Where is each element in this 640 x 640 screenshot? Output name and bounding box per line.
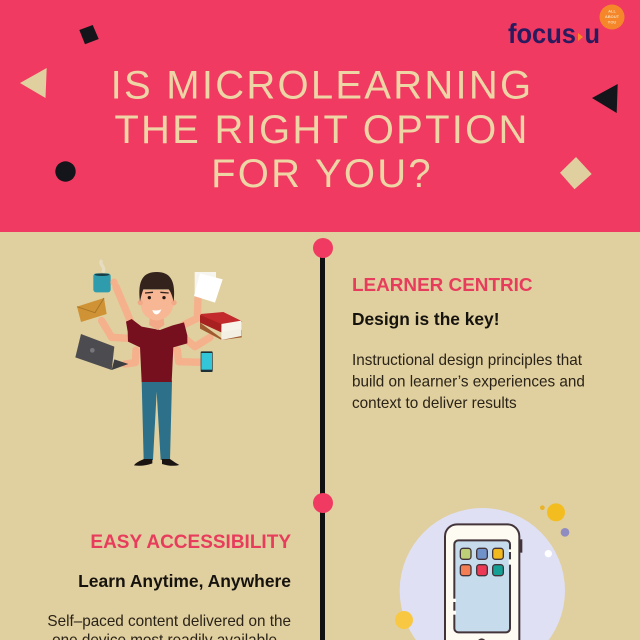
title — [111, 64, 533, 196]
title: THE RIGHT OPTION — [114, 108, 530, 152]
jeans — [142, 381, 172, 460]
badge: all about you: ALL — [608, 8, 616, 14]
logo: focus u — [508, 4, 624, 49]
subheading: Learn Anytime, Anywhere — [78, 571, 291, 591]
head — [138, 272, 177, 321]
section: easy accessibility text — [47, 532, 291, 640]
decorative dots — [395, 503, 569, 629]
phone screen — [454, 540, 510, 632]
title: FOR YOU? — [211, 152, 433, 196]
heading: LEARNER CENTRIC — [352, 275, 533, 296]
logo: focus u: focus — [508, 18, 576, 49]
background panel — [0, 232, 640, 640]
icon: cream diamond — [560, 157, 592, 189]
title: IS MICROLEARNING — [111, 64, 533, 108]
neck — [149, 315, 164, 330]
phone side button — [519, 539, 522, 553]
body text: context to deliver results — [352, 395, 517, 412]
coffee mug — [93, 260, 118, 292]
body text — [47, 613, 291, 640]
body text: Instructional design principles that — [352, 352, 583, 369]
smartphone — [201, 351, 213, 372]
arms — [102, 287, 210, 364]
body text: build on learner’s experiences and — [352, 374, 585, 390]
subheading: Design is the key! — [352, 309, 499, 329]
section: learner centric text — [352, 275, 585, 412]
lavender circle — [400, 508, 565, 640]
laptop — [75, 334, 128, 370]
shirt — [126, 319, 187, 382]
badge: all about you: YOU — [608, 20, 616, 24]
app icons — [460, 548, 503, 576]
envelope — [77, 298, 107, 322]
icon: black circle — [55, 161, 76, 182]
timeline dot 2 — [313, 493, 333, 513]
heading: EASY ACCESSIBILITY — [90, 532, 291, 553]
body text — [352, 352, 585, 412]
screen highlights — [453, 549, 512, 615]
icon: black square — [79, 25, 99, 44]
badge: all about you: ABOUT — [605, 14, 620, 19]
timeline — [313, 238, 333, 640]
illustration: multitasking man — [75, 260, 242, 466]
illustration: smartphone on lavender circle — [395, 503, 569, 640]
papers — [194, 272, 223, 303]
logo: focus u: u — [584, 18, 600, 49]
badge: all about you — [600, 4, 624, 30]
timeline dot 1 — [313, 238, 333, 258]
books — [200, 312, 242, 340]
home button — [477, 638, 486, 640]
header panel — [0, 0, 640, 232]
shoes — [134, 459, 179, 466]
icon: black triangle — [592, 84, 618, 113]
body text: Self–paced content delivered on the — [47, 613, 291, 630]
icon: cream triangle — [20, 68, 47, 98]
phone body — [445, 524, 519, 640]
